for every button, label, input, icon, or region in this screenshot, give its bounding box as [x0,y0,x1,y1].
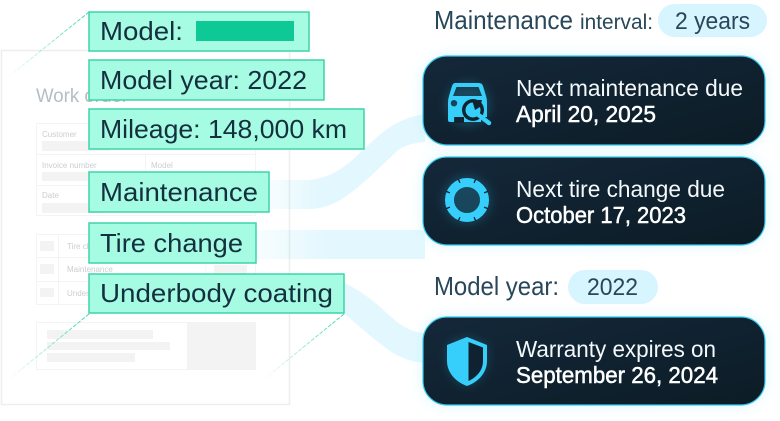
card: warranty: September 26, 2024 [516,362,718,388]
label: mileage: Mileage: 148,000 km [100,114,347,144]
work order document: Tire change [67,242,110,251]
label: tire change: Tire change [100,228,243,258]
label: model year [89,60,324,100]
flow: tire change to next tire change card [256,230,425,259]
label: mileage [89,109,364,149]
work order document: Model [151,161,173,170]
card: next maintenance [423,56,765,145]
icon: tire [443,176,491,224]
card: next maintenance: April 20, 2025 [516,101,656,127]
icon: shield [447,337,487,386]
card: next tire change: Next tire change due [516,176,725,202]
heading: maintenance interval: interval: [580,11,653,34]
work order document: Underbody coating [67,289,134,298]
label: model: Model: [100,16,183,46]
label: maintenance [89,172,269,212]
work order document: Maintenance [67,265,113,274]
flow: underbody coating to warranty card [343,283,425,363]
scan guide lines [7,12,344,381]
card: next maintenance: Next maintenance due [516,75,743,101]
work order document: Work order [36,86,129,107]
card: next tire change: October 17, 2023 [516,202,686,228]
card: warranty [423,317,765,405]
work order document: Date [42,191,59,200]
label: model [89,12,309,51]
wrench [466,100,489,123]
heading: model year: 2022 [587,274,638,301]
label: maintenance: Maintenance [100,177,258,207]
label: model year: Model year: 2022 [100,65,307,95]
card: next tire change [423,157,765,245]
work order document: Customer [42,130,77,139]
label: underbody coating: Underbody coating [100,278,333,308]
label: tire change [89,223,256,263]
work order document: Invoice number [42,161,97,170]
work order document [2,50,290,404]
card: warranty: Warranty expires on [516,336,716,362]
heading: maintenance interval [434,4,767,37]
label: underbody coating [89,274,344,313]
heading: maintenance interval: Maintenance [434,5,573,35]
heading: model year [434,270,658,304]
heading: maintenance interval: 2 years [675,8,750,35]
heading: model year: Model year: [434,271,559,301]
flow: maintenance to next maintenance card [269,114,425,209]
icon: car with wrench [446,82,490,126]
